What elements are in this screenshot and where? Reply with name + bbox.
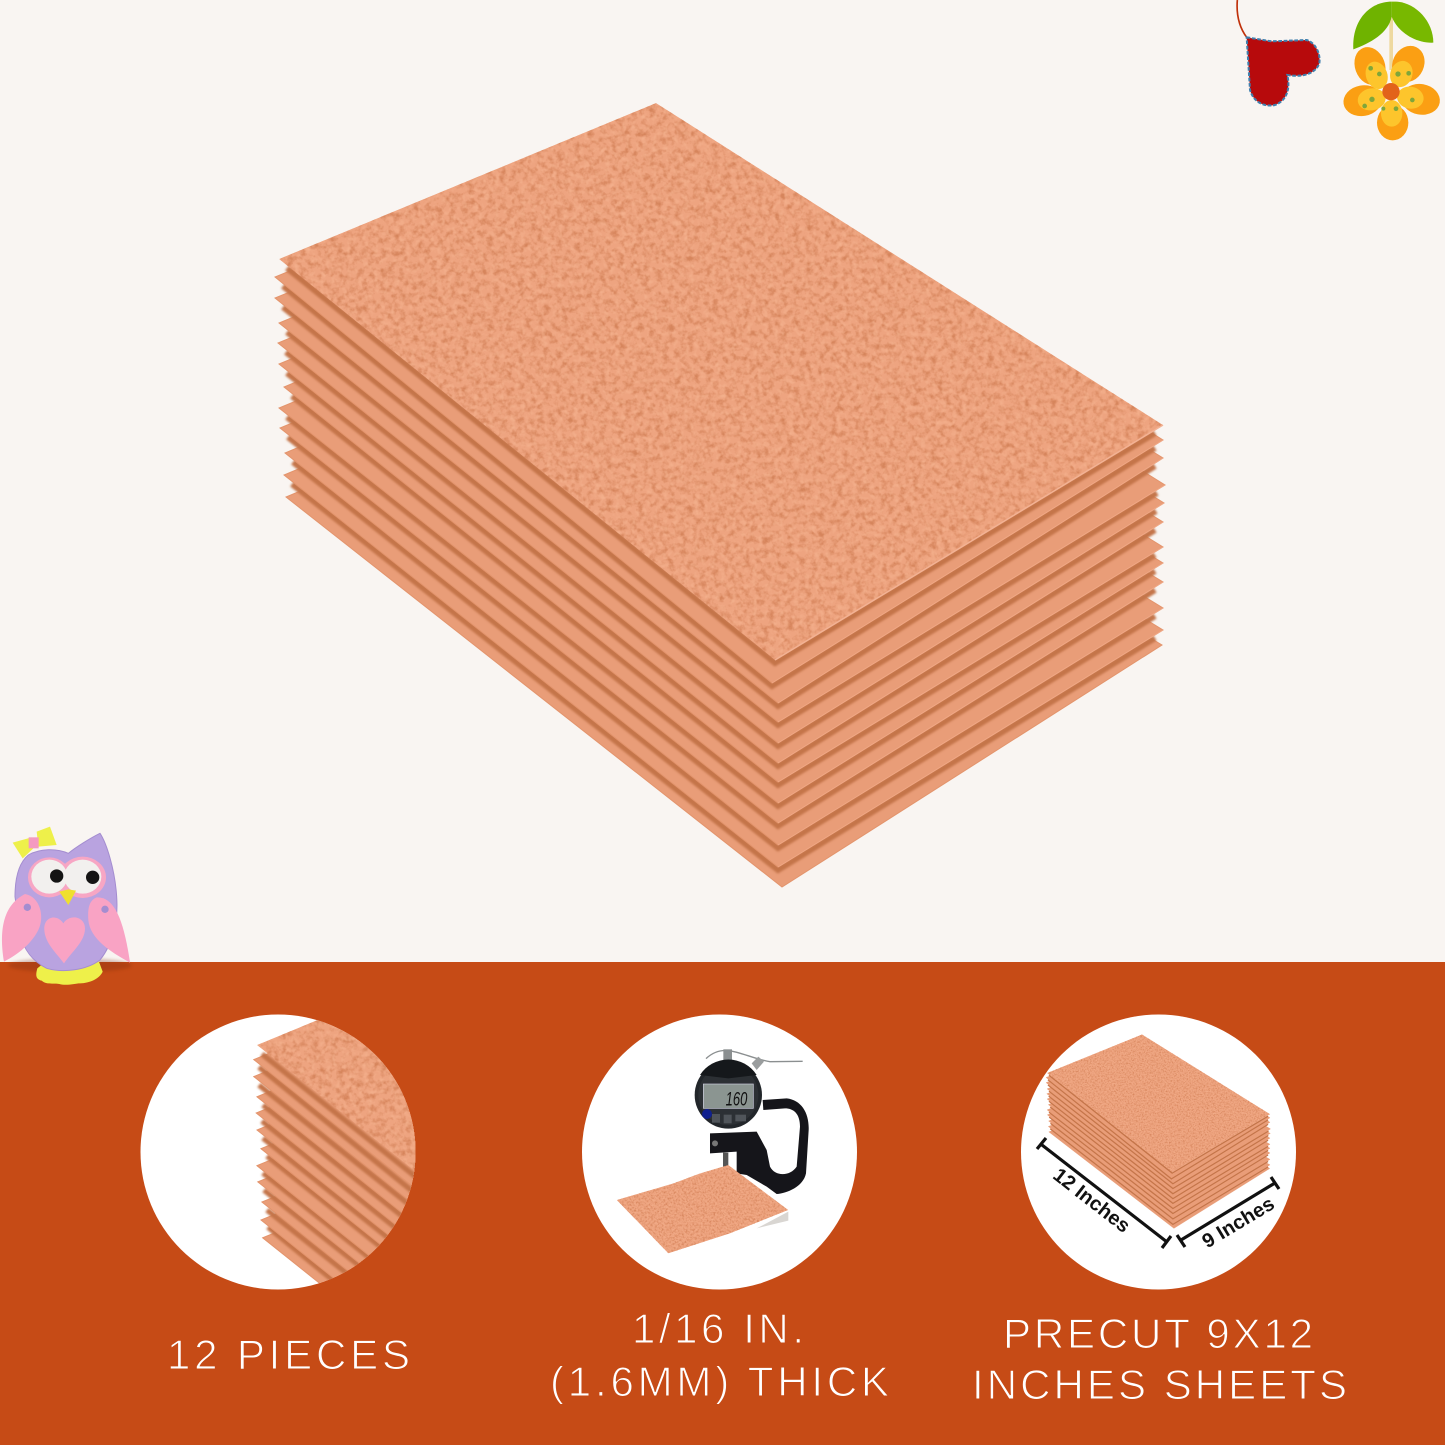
main image: stack of 12 felt sheets: [275, 103, 1165, 887]
dimension: 9 inches: [1177, 1177, 1279, 1253]
panel: 12 pieces close-up circle: [140, 1014, 416, 1290]
dimension: 12 inches: [1037, 1138, 1171, 1248]
caption: thickness: (1.6MM) THICK: [550, 1358, 889, 1405]
caption: thickness: 1/16 IN.: [632, 1305, 804, 1352]
caption: 12 pieces: 12 PIECES: [167, 1331, 410, 1378]
panel: precut size circle: [1021, 1014, 1296, 1290]
caption: sheet size: [972, 1310, 1347, 1408]
icon: purple felt owl: [2, 827, 132, 985]
dimension: 9 inches: 9 Inches: [1199, 1193, 1278, 1253]
bottom orange band: [0, 962, 1445, 1445]
icon: red felt heart ornament: [1237, 0, 1320, 106]
panel: thickness gauge circle: [582, 1014, 857, 1290]
dimension: 12 inches: 12 Inches: [1049, 1164, 1134, 1238]
caption: sheet size: INCHES SHEETS: [972, 1361, 1347, 1408]
icon: digital thickness gauge: [617, 1049, 809, 1253]
icon: digital thickness gauge: 160: [726, 1089, 747, 1110]
icon: orange felt flower with green leaves: [1341, 2, 1442, 140]
caption: sheet size: PRECUT 9X12: [1003, 1310, 1313, 1357]
caption: thickness: [550, 1305, 889, 1405]
